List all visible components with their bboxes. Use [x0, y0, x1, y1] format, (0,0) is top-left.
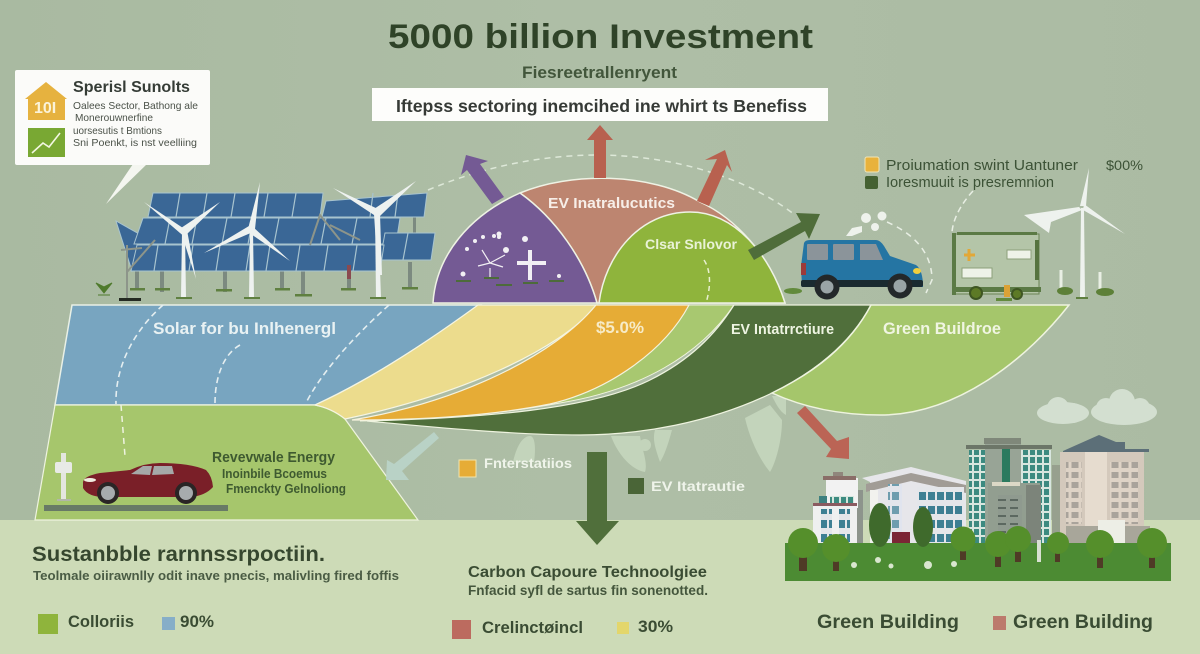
band: renewable energy green panel: [35, 405, 418, 520]
clouds: [1037, 389, 1157, 425]
lamp post: [55, 453, 72, 501]
arrow: red right: [697, 150, 732, 206]
lattice pylon: [121, 215, 360, 300]
band label: percent: $5.0%: [596, 318, 644, 337]
legend: top right: Ioresmuuit is presremnion: [886, 174, 1054, 191]
band: light green sliver: [360, 305, 734, 421]
icon: exhaust clouds: [846, 212, 886, 236]
wind turbine 2: [204, 182, 290, 298]
icon: growth chart: [28, 128, 65, 157]
renewable energy text: Fmenckty Gelnoliong: [226, 481, 346, 496]
small plant: [96, 283, 112, 295]
building: white office: [862, 467, 966, 554]
icon: house: [25, 82, 67, 120]
bottom panel: [0, 520, 1200, 654]
legend: top right: Proiumation swint Uantuner: [886, 157, 1078, 174]
small plants right: [1057, 270, 1114, 296]
wind turbine 1: [144, 202, 220, 298]
dashed link: [121, 405, 125, 456]
subtitle banner: Iftepss sectoring inemcihed ine whirt ts Benefiss: [396, 96, 807, 116]
legend: colors: Colloriis: [68, 612, 134, 631]
text: sustainable transport: Sustanbble rarnnssrpoctiin.: [32, 543, 325, 566]
callout text: Sni Poenkt, is nst veelliing: [73, 137, 197, 149]
legend: green building: [817, 612, 1153, 633]
callout text: uorsesutis t Bmtions: [73, 125, 162, 137]
dome label: clean: Clsar Snlovor: [645, 236, 738, 252]
map legend: orange: Fnterstatiios: [484, 455, 572, 471]
map legend: dark green: [628, 478, 745, 494]
legend: colors: [38, 612, 214, 634]
dome label: EV: EV Inatralucutics: [548, 195, 675, 212]
text: carbon capture: [468, 564, 708, 598]
dome: salmon: [520, 178, 785, 303]
arrow: red lower right: [797, 406, 849, 459]
purple dome icons: [460, 232, 561, 280]
dashed arc above domes: [428, 155, 795, 215]
legend: green building: Green Building: [1013, 612, 1153, 633]
band label: EV infrastructure: EV Intatrrctiure: [731, 322, 834, 338]
band label: solar: Solar for bu Inlhenergl: [153, 319, 336, 338]
building: white left: [813, 472, 863, 555]
band: orange segment: [352, 305, 689, 420]
callout text: [73, 100, 198, 149]
text: sustainable transport: [32, 543, 399, 583]
dashed curve near SUV: [887, 222, 932, 293]
band: green building segment: [772, 305, 1069, 415]
text: carbon capture: Carbon Capoure Technoolgiee: [468, 564, 707, 581]
icon: blue SUV: [784, 240, 923, 300]
world map silhouettes: [513, 396, 786, 472]
renewable energy text: Inoinbile Bcoemus: [222, 466, 327, 481]
band dashed curves: [116, 305, 389, 404]
legend: colors: 90%: [180, 612, 214, 631]
band: dark green segment: [367, 305, 871, 435]
callout tail: [106, 164, 147, 204]
dome: green: [599, 212, 785, 303]
band: yellow segment: [315, 305, 597, 419]
title: 5000 billion Investment: [388, 18, 813, 56]
dashed curve to legend: [952, 191, 973, 232]
icon: house: 10I: [34, 100, 56, 117]
small figure: [347, 265, 351, 279]
renewable energy text: Revevwale Energy: [212, 450, 335, 466]
dome: purple: [433, 193, 597, 303]
text: sustainable transport: Teolmale oiirawnlly odit inave pnecis, malivling fired foffis: [33, 568, 399, 583]
legend: crelinct: 30%: [638, 618, 673, 636]
arrow: pale: [386, 432, 439, 480]
building: teal tower: [966, 438, 1060, 545]
band label: green building: Green Buildroe: [883, 320, 1001, 338]
arrow: dark green down: [576, 452, 619, 545]
map legend: dark green: EV Itatrautie: [651, 478, 745, 494]
legend: crelinct: [452, 618, 673, 639]
building: far right beige: [1060, 435, 1150, 556]
callout text: Monerouwnerfine: [75, 112, 153, 124]
legend: crelinct: Crelinctøincl: [482, 619, 583, 637]
subtitle: Fiesreetrallenryent: [522, 63, 677, 82]
callout text: Oalees Sector, Bathong ale: [73, 100, 198, 112]
solar and wind farm: [96, 181, 435, 301]
road: [44, 505, 228, 511]
trees: [788, 503, 1167, 571]
ground: [785, 543, 1171, 581]
solar panels: [116, 221, 150, 271]
legend: green building: Green Building: [817, 612, 959, 633]
icon: red sedan: [44, 453, 228, 511]
icon: charging kiosk: [952, 232, 1041, 301]
subtitle banner: [372, 88, 828, 121]
panel poles: [135, 217, 416, 294]
wind turbine 3: [333, 181, 416, 298]
map legend: orange: [459, 455, 572, 477]
band: solar blue segment: [55, 305, 480, 405]
legend: top right: $00%: [1106, 158, 1143, 173]
dome dashed line: [704, 260, 710, 303]
callout heading: Sperisl Sunolts: [73, 79, 190, 96]
green buildings scene: [785, 435, 1171, 581]
callout panel: [15, 70, 210, 204]
icon: wind turbine right: [1024, 168, 1125, 299]
renewable energy text: [212, 450, 346, 496]
arrow: dark green: [748, 213, 820, 260]
arrow: purple: [461, 155, 504, 204]
legend: top right: [865, 157, 1143, 191]
arrow: red up: [587, 125, 613, 178]
text: carbon capture: Fnfacid syfl de sartus fin sonenotted.: [468, 582, 708, 598]
